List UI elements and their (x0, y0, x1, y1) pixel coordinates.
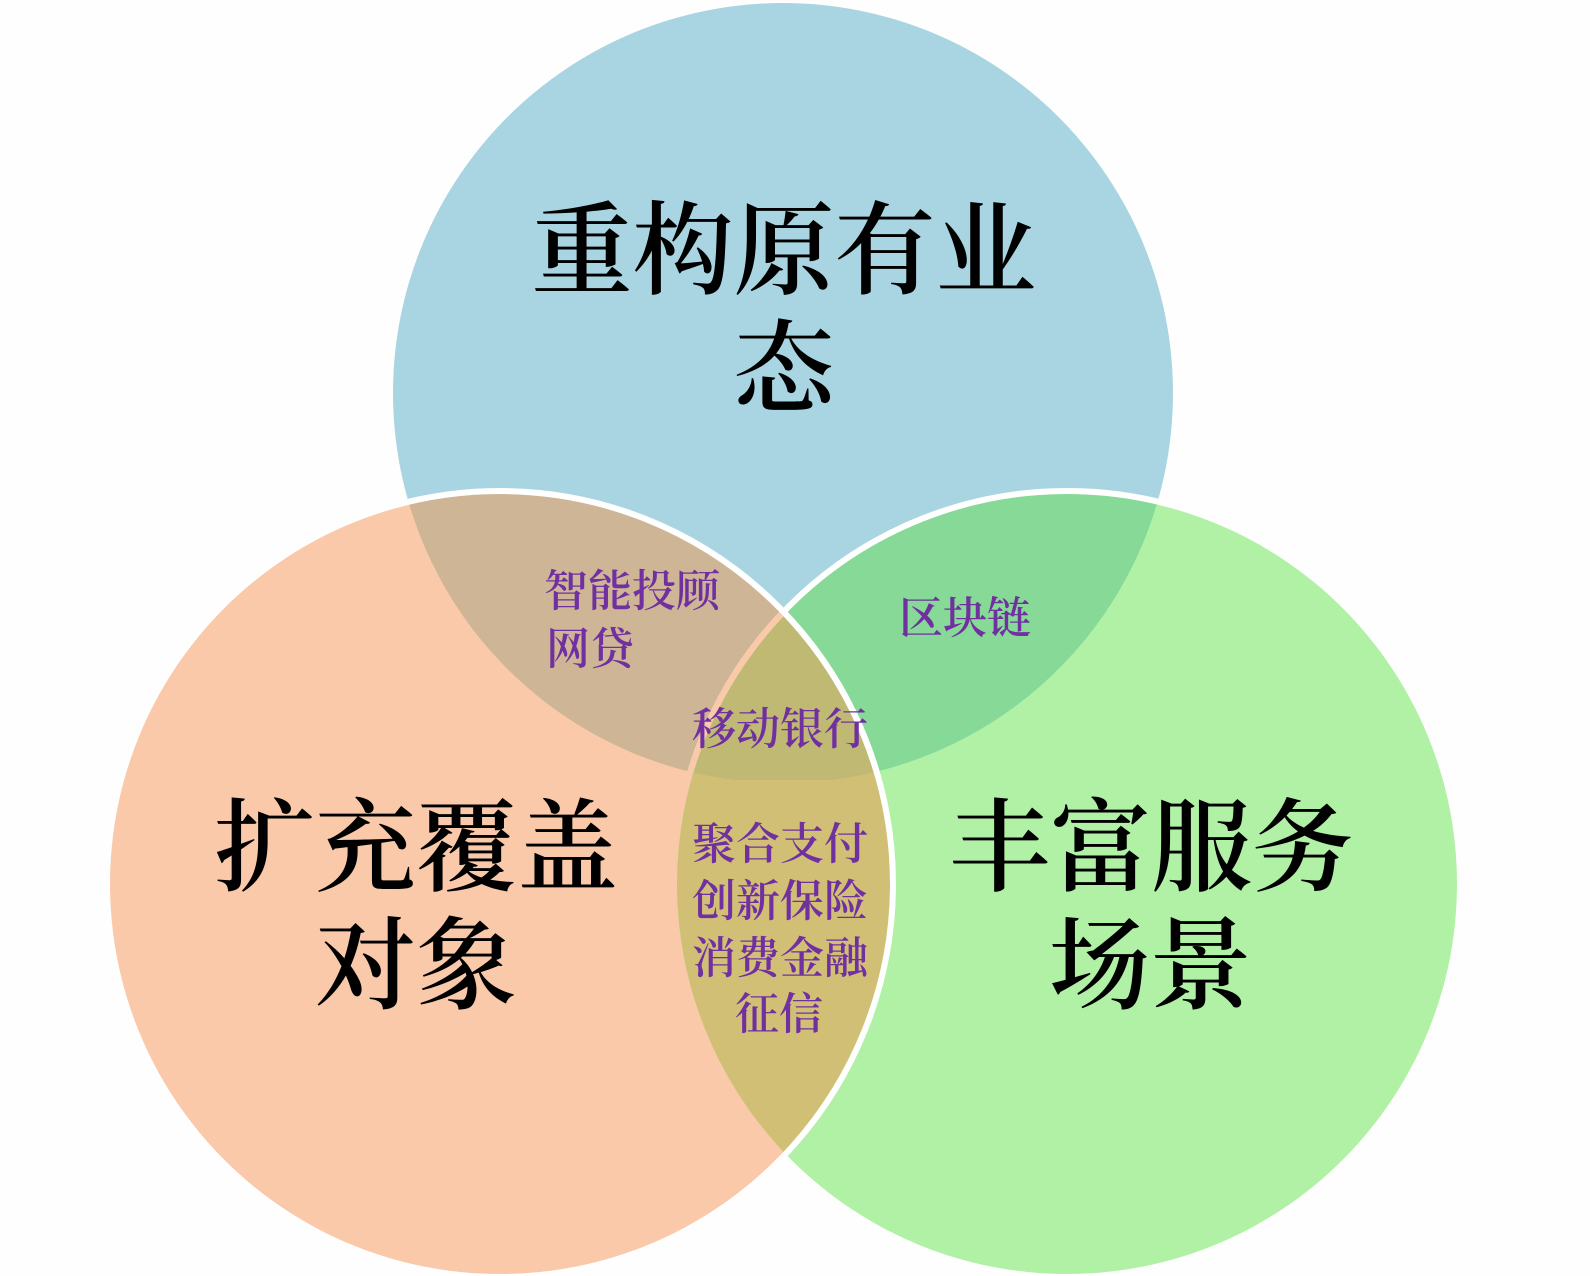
overlap: top and left (409, 494, 779, 771)
overlap: top and right (788, 494, 1157, 771)
circle: right green (677, 494, 1457, 1274)
heading: top circle: 重构原有业 (531, 196, 1037, 308)
heading: left circle (214, 793, 618, 1023)
circle: top blue (393, 3, 1173, 783)
heading: right circle: 丰富服务 (949, 793, 1353, 905)
overlap: left and right (677, 628, 890, 1152)
heading: top circle (531, 196, 1037, 426)
white edge of right circle inside top circle (688, 488, 1158, 772)
label: left and right overlap: 消费金融 (692, 934, 870, 983)
label: top and left overlap: 智能投顾 (544, 567, 722, 616)
circle: left peach (110, 494, 890, 1274)
label: top and right overlap: 区块链 (899, 594, 1031, 643)
heading: left circle: 对象 (315, 911, 517, 1023)
heading: left circle: 扩充覆盖 (214, 793, 618, 905)
label: top and left overlap (544, 567, 722, 674)
label: left and right overlap: 创新保险 (692, 877, 868, 926)
white edge of left circle inside top circle (408, 488, 880, 772)
label: top and left overlap: 网贷 (546, 625, 638, 674)
label: left and right overlap (692, 820, 870, 1039)
label: centre overlap: 移动银行 (692, 705, 868, 754)
label: left and right overlap: 征信 (735, 990, 823, 1039)
peach edge of right circle inside left overlap (688, 612, 784, 772)
label: left and right overlap: 聚合支付 (692, 820, 868, 869)
heading: right circle: 场景 (1049, 911, 1251, 1023)
white edge of left circle inside right circle (784, 612, 896, 1156)
heading: top circle: 态 (733, 314, 839, 426)
overlap: all three (694, 616, 874, 780)
heading: right circle (949, 793, 1353, 1023)
